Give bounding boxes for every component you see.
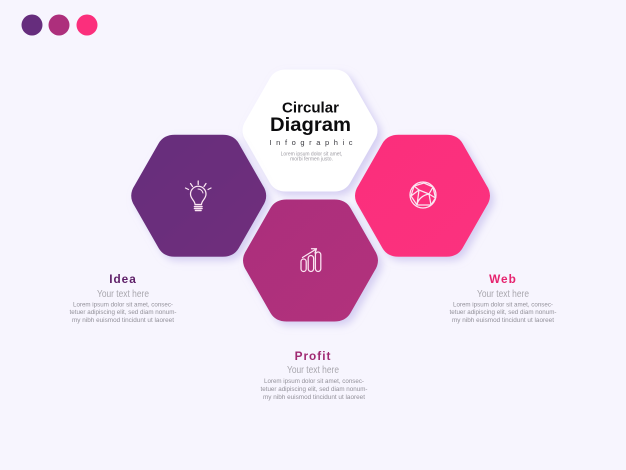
panel: pink web hexagon: [355, 135, 490, 257]
subheading: Idea: Your text here: [97, 289, 149, 300]
colour palette dots: [22, 14, 98, 36]
heading: Web: Web: [489, 272, 517, 286]
subheading: Web: Your text here: [477, 289, 529, 300]
subheading: Profit: Your text here: [287, 365, 339, 376]
panel: white title hexagon: [242, 70, 378, 192]
body: Profit: Lorem ipsum dolor sit amet, consec-: [264, 378, 364, 385]
panel: purple idea hexagon: [131, 135, 266, 257]
icon: light bulb: [186, 181, 211, 210]
body: Profit: my nibh euismod tincidunt ut laoreet: [263, 394, 365, 401]
title: Diagram: Diagram: [270, 115, 351, 136]
subtitle: Infographic: Infographic: [270, 138, 353, 147]
title description text: Lorem ipsum dolor sit amet,: [281, 152, 342, 158]
icon: growth bar chart: [301, 249, 321, 272]
text block: Web: [450, 272, 556, 324]
body: Profit: tetuer adipiscing elit, sed diam nonum-: [260, 386, 368, 393]
body: Web: [450, 301, 556, 324]
body: Web: Lorem ipsum dolor sit amet, consec-: [453, 301, 553, 308]
body: Idea: [70, 301, 176, 324]
panel: magenta profit hexagon: [243, 200, 378, 322]
body: Idea: my nibh euismod tincidunt ut laoreet: [72, 317, 174, 324]
body: Idea: tetuer adipiscing elit, sed diam nonum-: [70, 309, 176, 316]
heading: Idea: Idea: [109, 272, 137, 286]
text block: Profit: [260, 349, 368, 401]
body: Idea: Lorem ipsum dolor sit amet, consec-: [73, 301, 173, 308]
text block: Idea: [70, 272, 176, 324]
icon: network globe: [410, 182, 436, 208]
heading: Profit: Profit: [295, 349, 331, 363]
title: Circular: Circular: [282, 100, 339, 116]
body: Web: tetuer adipiscing elit, sed diam nonum-: [450, 309, 556, 316]
body: Profit: [260, 378, 368, 401]
title description text: morbi fermen justo.: [290, 156, 333, 162]
body: Web: my nibh euismod tincidunt ut laoreet: [452, 317, 554, 324]
